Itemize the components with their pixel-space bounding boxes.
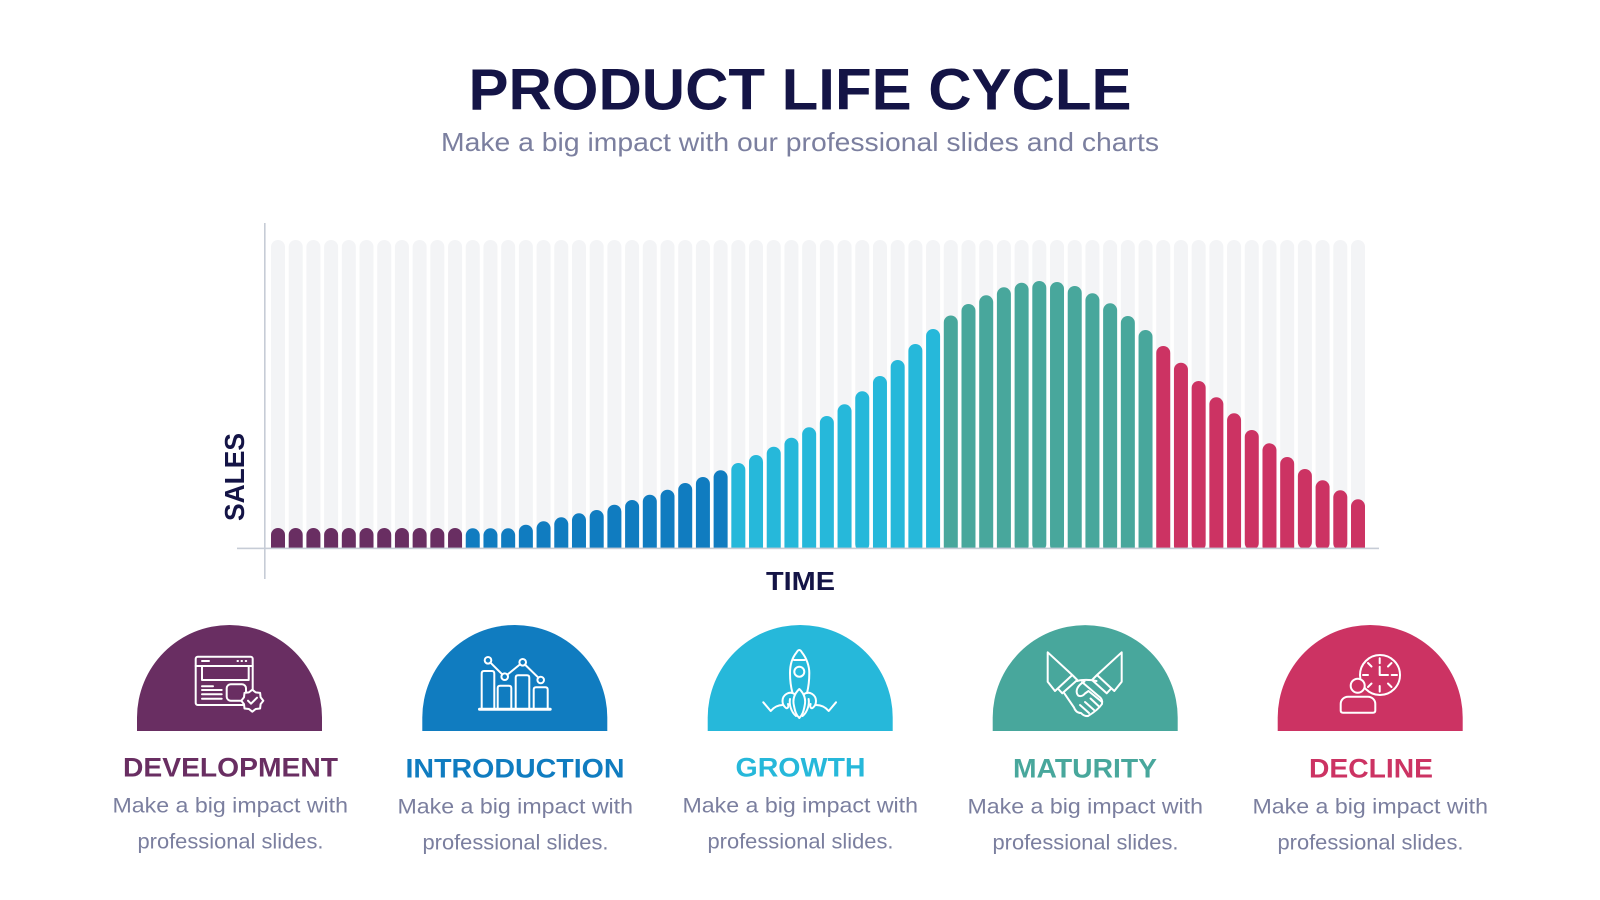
heading: decline: DECLINE: [1309, 754, 1433, 784]
description: decline: [1252, 794, 1488, 854]
icon: person with clock: [1341, 655, 1400, 713]
semicircle: introduction: [422, 625, 607, 731]
description: maturity: [968, 794, 1203, 854]
description: introduction: [398, 794, 633, 854]
description: growth: Make a big impact with: [682, 794, 918, 818]
bars: growth stage: [731, 329, 940, 563]
panel: decline: [1252, 625, 1488, 854]
description: development: Make a big impact with: [112, 794, 348, 818]
subtitle: Make a big impact with our professional slides and charts: [441, 127, 1159, 157]
heading: development: DEVELOPMENT: [123, 752, 339, 782]
chart background tracks: [271, 240, 1365, 560]
icon: web page with check badge: [196, 657, 263, 712]
description: decline: professional slides.: [1278, 830, 1464, 854]
semicircle: growth: [708, 625, 893, 731]
description: introduction: professional slides.: [422, 830, 608, 854]
icon: rocket: [763, 650, 836, 718]
x axis label: TIME: [766, 566, 835, 596]
chart: sales over time: [219, 223, 1379, 596]
panel: development: [112, 625, 348, 854]
heading: growth: GROWTH: [736, 752, 866, 782]
semicircle: development: [137, 625, 322, 731]
axes: [237, 223, 1379, 579]
heading: introduction: INTRODUCTION: [406, 754, 624, 784]
icon: bar chart with trend line: [480, 657, 550, 709]
description: maturity: professional slides.: [992, 830, 1178, 854]
description: decline: Make a big impact with: [1252, 794, 1488, 818]
bars: decline stage: [1156, 346, 1365, 559]
panel: maturity: [968, 625, 1203, 854]
description: growth: [682, 794, 918, 854]
panel: growth: [682, 625, 918, 854]
title: PRODUCT LIFE CYCLE: [468, 58, 1132, 122]
heading: maturity: MATURITY: [1013, 754, 1157, 784]
description: introduction: Make a big impact with: [398, 794, 633, 818]
icon: handshake: [1048, 652, 1122, 716]
description: development: [112, 794, 348, 854]
description: development: professional slides.: [138, 830, 324, 854]
y axis label: SALES: [219, 433, 250, 521]
semicircle: decline: [1278, 625, 1463, 731]
bars: maturity stage: [944, 281, 1153, 560]
description: growth: professional slides.: [708, 830, 894, 854]
bars: development stage: [271, 528, 462, 548]
bars: introduction stage: [466, 470, 728, 548]
description: maturity: Make a big impact with: [968, 794, 1203, 818]
panel: introduction: [398, 625, 633, 854]
semicircle: maturity: [993, 625, 1178, 731]
